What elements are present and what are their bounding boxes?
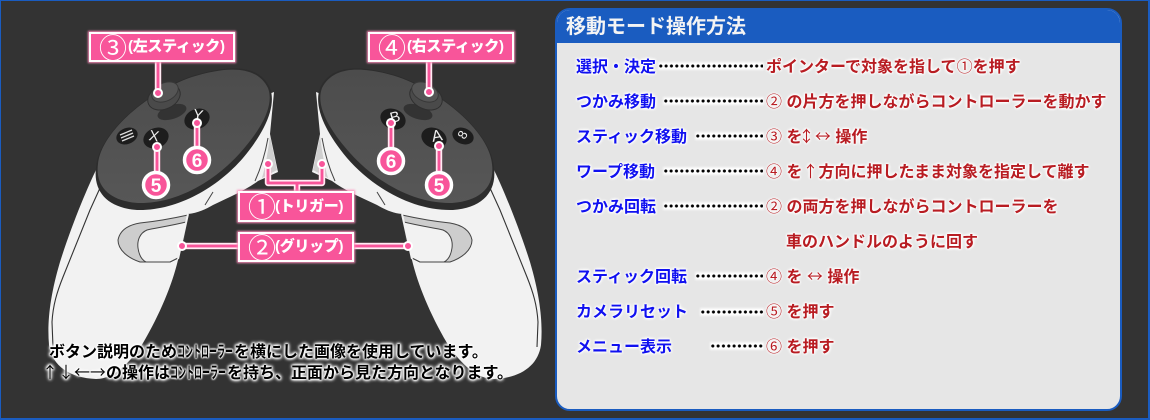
- note text under the controllers: コントローラー: [170, 365, 226, 382]
- panel heading: 移動モード操作方法: [566, 16, 746, 38]
- label: right stick: [368, 32, 514, 62]
- left controller: [48, 68, 278, 379]
- callout 6 left: [184, 148, 210, 172]
- right controller: [312, 68, 542, 379]
- text: ↕: [798, 123, 814, 147]
- callout anchor dots: [153, 88, 443, 250]
- row: grab move: つかみ移動: [576, 94, 656, 111]
- callout leader lines: [157, 62, 439, 246]
- note text under the controllers: ↑↓←→の操作は を持ち、正面から見た方向となります。: [42, 359, 513, 383]
- text: ④ を↑方向に押したまま対象を指定して離す: [766, 158, 1090, 182]
- row: grab rotate: つかみ回転: [576, 199, 656, 216]
- row: grab rotate continued: 車のハンドルのように回す: [786, 234, 978, 251]
- text: ② の片方を押しながらコントローラーを動かす: [766, 94, 1106, 111]
- callout 5 left: [144, 172, 168, 198]
- icon: system button: 8: [454, 128, 471, 142]
- text: ④ を ↔ 操作: [766, 263, 859, 287]
- label: grip: (グリップ): [275, 238, 343, 255]
- text: ⑥ を押す: [766, 339, 834, 356]
- note text under the controllers: コントローラー: [177, 344, 233, 361]
- row: stick rotate: スティック回転: [576, 269, 687, 286]
- note text under the controllers: ボタン説明のため を横にした画像を使用しています。: [49, 344, 488, 361]
- callout 5 right: [426, 172, 452, 198]
- row: menu display: メニュー表示: [576, 339, 672, 356]
- label: grip: [238, 232, 354, 262]
- row: camera reset: カメラリセット: [576, 304, 688, 321]
- label: left stick: [89, 32, 235, 62]
- text: ② の両方を押しながらコントローラーを: [766, 199, 1058, 216]
- label: trigger: [238, 191, 354, 222]
- callout 6 right: [378, 148, 404, 174]
- panel heading: [555, 8, 1122, 43]
- button letter Y: Y: [192, 106, 204, 125]
- panel: movement mode instructions: [555, 8, 1122, 411]
- row: stick move: スティック移動: [576, 129, 687, 146]
- label: left stick: ③: [99, 27, 127, 67]
- illustration: pair of controllers: [48, 62, 542, 379]
- callout 5 right: 5: [434, 176, 445, 197]
- callout 5 left: 5: [151, 176, 162, 197]
- callout 6 right: 6: [386, 152, 396, 173]
- icon: menu button: [120, 130, 134, 141]
- button letter B: B: [388, 108, 402, 127]
- callout 6 left: 6: [192, 151, 202, 172]
- row: select and confirm: 選択・決定: [576, 59, 656, 76]
- label: trigger: ①: [248, 186, 276, 226]
- text: ポインターで対象を指して①を押す: [766, 59, 1021, 76]
- label: right stick: ④: [378, 27, 406, 67]
- button letter A: A: [430, 127, 444, 146]
- label: right stick: (右スティック): [407, 38, 504, 55]
- text: ⑤ を押す: [766, 304, 834, 321]
- row: warp move: ワープ移動: [576, 164, 655, 181]
- label: grip: ②: [248, 227, 276, 267]
- label: trigger: (トリガー): [275, 198, 343, 215]
- button letter X: X: [148, 127, 160, 146]
- label: left stick: (左スティック): [128, 38, 225, 55]
- note text under the controllers: [42, 340, 513, 384]
- text: ③ を ↔ 操作: [766, 123, 867, 147]
